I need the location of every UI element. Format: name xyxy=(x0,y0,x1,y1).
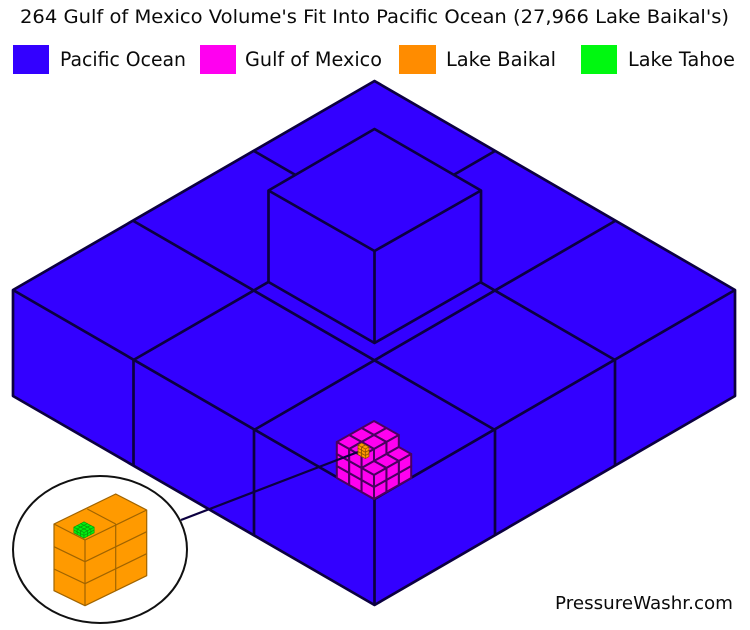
small Lake Baikal stack xyxy=(358,443,369,459)
Gulf of Mexico stack xyxy=(337,421,411,499)
legend item: Lake Tahoe xyxy=(581,45,735,74)
legend item: Lake Baikal: Lake Baikal xyxy=(446,48,556,71)
legend item: Lake Baikal xyxy=(399,45,556,74)
center raised Pacific block xyxy=(268,129,481,343)
inset: Lake Baikal blocks xyxy=(54,494,147,606)
watermark: PressureWashr.com xyxy=(555,593,733,614)
legend item: Pacific Ocean: Pacific Ocean xyxy=(60,48,186,71)
inset circle xyxy=(13,476,187,623)
inset: Lake Tahoe cluster xyxy=(74,522,94,538)
legend item: Lake Tahoe: Lake Tahoe xyxy=(628,48,735,71)
legend xyxy=(13,45,735,74)
leader line from stack to inset xyxy=(181,452,358,520)
legend item: Gulf of Mexico xyxy=(200,45,382,74)
title: 264 Gulf of Mexico Volume's Fit Into Pacific Ocean (27,966 Lake Baikal's) xyxy=(20,6,729,28)
legend item: Pacific Ocean xyxy=(13,45,186,74)
legend item: Gulf of Mexico: Gulf of Mexico xyxy=(245,48,382,71)
